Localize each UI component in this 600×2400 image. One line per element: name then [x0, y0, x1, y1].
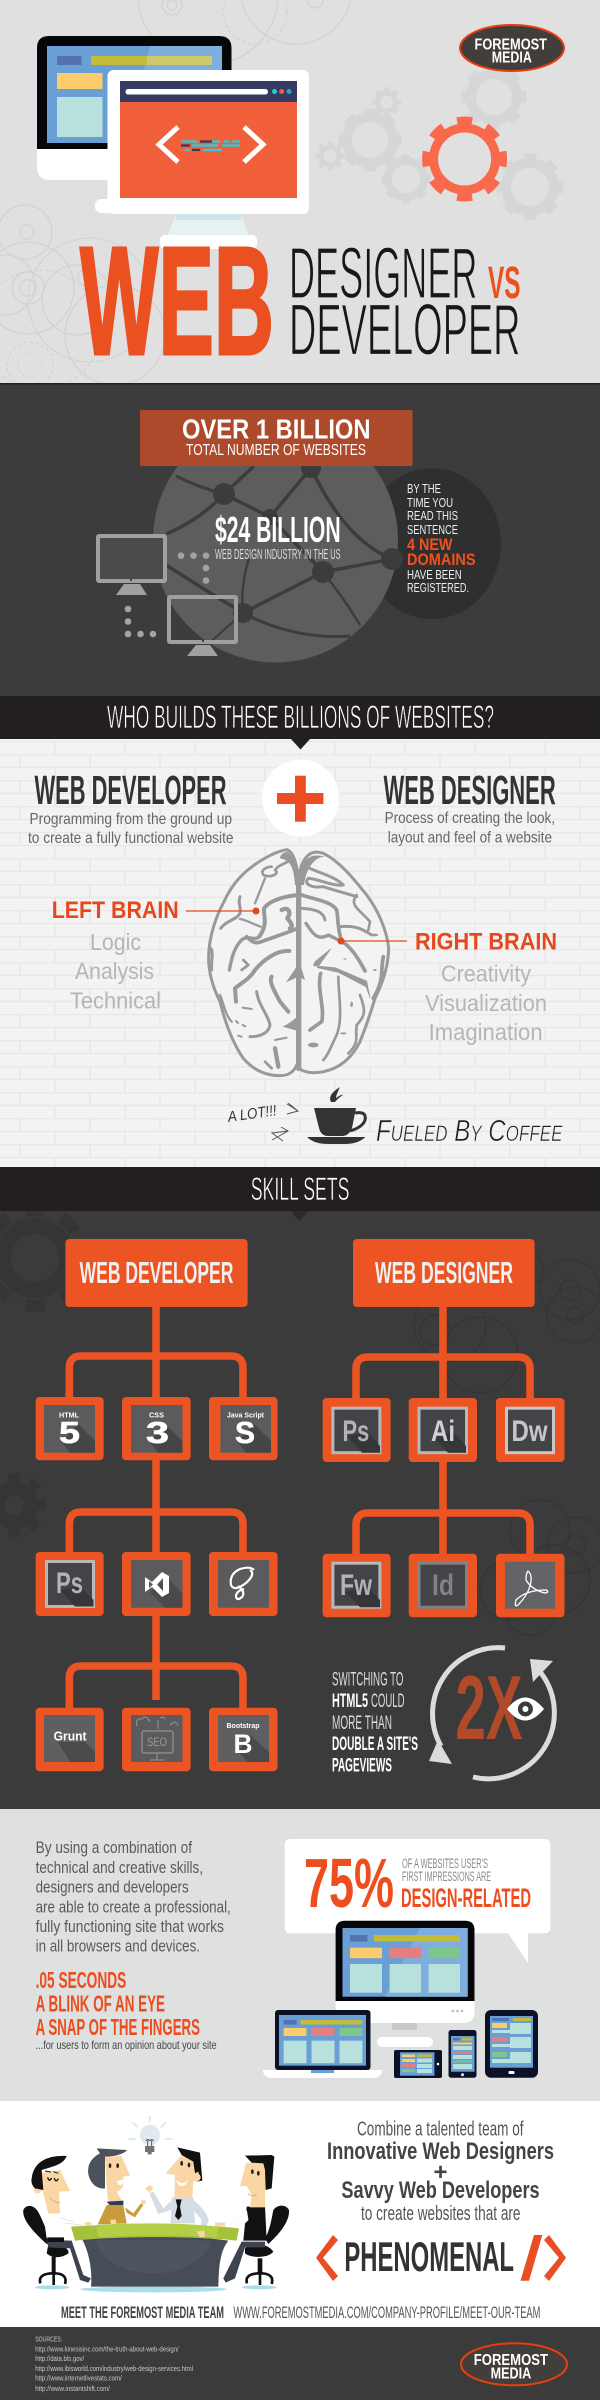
icon: javascript [209, 1397, 278, 1460]
icon: 2x with arrows and eye [429, 1648, 554, 1779]
text block: sources: SOURCES: [35, 2337, 62, 2344]
panel: website statistics [0, 383, 600, 696]
icon: designer photoshop: Ps [342, 1415, 369, 1448]
logo: footer Foremost Media: MEDIA [491, 2365, 532, 2382]
label: right brain: Creativity [441, 961, 531, 987]
label: right brain: Imagination [429, 1019, 543, 1045]
icon: acrobat [496, 1554, 564, 1617]
callout: over 1 billion [140, 410, 412, 466]
icon: css3 [122, 1397, 191, 1460]
callout: domains bubble: 4 NEW [407, 536, 453, 554]
callout: domains bubble [363, 468, 501, 619]
text block: combination of skills: designers and developers [36, 1879, 189, 1897]
icon: html5: 5 [59, 1415, 80, 1450]
icon: javascript: S [235, 1415, 255, 1450]
icon: photoshop [36, 1552, 104, 1616]
icon: html5 [36, 1397, 104, 1460]
annotation: a lot [226, 1102, 298, 1141]
text block: combine a talented team [327, 2119, 554, 2225]
panel: roles and brain background [0, 739, 600, 1167]
text: web designer: Process of creating the look, [385, 810, 555, 827]
panel: header background [0, 0, 600, 383]
callout: domains bubble: READ THIS [407, 509, 458, 523]
annotation: a lot: A LOT!!! [226, 1102, 278, 1126]
callout: domains bubble: HAVE BEEN [407, 568, 462, 582]
text: meet the team [61, 2304, 540, 2322]
panel: skill sets background [0, 1211, 600, 1809]
icon: plus [262, 760, 339, 836]
text block: combination of skills: technical and creative skills, [36, 1859, 203, 1877]
icon: grunt [36, 1708, 104, 1771]
icon: html5: HTML [59, 1410, 79, 1420]
tree connectors: developer [69, 1307, 243, 1708]
callout: domains bubble: TIME YOU [407, 496, 453, 510]
icon: computer two [169, 597, 236, 656]
icon: responsive tablet [485, 2010, 538, 2078]
callout: over 1 billion: OVER 1 BILLION [182, 413, 370, 444]
callout: over 1 billion: TOTAL NUMBER OF WEBSITES [186, 442, 366, 459]
text: web developer: Programming from the ground up [30, 811, 232, 828]
text: web designer: layout and feel of a website [388, 830, 552, 847]
icon: dreamweaver [496, 1398, 564, 1462]
text block: blink of an eye: ...for users to form an opinion about your site [36, 2038, 217, 2052]
illustration: team meeting [23, 2116, 289, 2292]
icon: coffee cup [307, 1087, 366, 1144]
icon: javascript: Java Script [227, 1410, 264, 1420]
icon: bootstrap [209, 1708, 278, 1771]
icon: seo: SEO [147, 1735, 167, 1749]
label: right brain: RIGHT BRAIN [415, 928, 557, 955]
icon: designer photoshop [323, 1398, 391, 1462]
text block: blink of an eye: .05 SECONDS [36, 1967, 126, 1993]
icon: front desktop monitor with code [95, 70, 309, 249]
icon: fireworks [323, 1554, 391, 1617]
logo: Foremost Media [460, 25, 564, 71]
icon: bootstrap: B [234, 1729, 252, 1759]
icon: 2x with arrows and eye: 2X [455, 1658, 522, 1759]
text: 24 billion [215, 509, 341, 563]
text block: combine a talented team: Savvy Web Developers [341, 2177, 540, 2204]
text block: sources: http://www.kinesisinc.com/the-truth-about-web-design/ [35, 2346, 179, 2353]
panel: impressions background [0, 1809, 600, 2101]
callout: domains bubble: BY THE [407, 482, 441, 496]
icon: connection dots [125, 552, 209, 637]
icon: dreamweaver: Dw [512, 1415, 548, 1448]
label: right brain: Visualization [425, 990, 547, 1016]
label: left brain: LEFT BRAIN [52, 897, 179, 924]
heading: skill sets [0, 1167, 600, 1221]
text block: combination of skills: in all browsers and devices. [36, 1938, 200, 1956]
text block: sources [35, 2337, 193, 2393]
box: web designer [353, 1239, 535, 1307]
icon: indesign [409, 1554, 477, 1617]
icon: css3: CSS [149, 1410, 164, 1420]
icon: responsive desktop [336, 1921, 474, 2047]
icon: network globe [153, 418, 403, 662]
text block: blink of an eye: A BLINK OF AN EYE [36, 1991, 165, 2017]
text: web developer: WEB DEVELOPER [34, 767, 226, 813]
icon: illustrator: Ai [431, 1415, 455, 1448]
text block: sources: http://www.ibisworld.com/industry/web-design-services.html [35, 2366, 193, 2373]
label: right brain [338, 928, 557, 1045]
text: 24 billion: WEB DESIGN INDUSTRY IN THE US [215, 547, 341, 563]
text block: combination of skills: are able to create a professional, [36, 1898, 231, 1916]
box: web developer [65, 1239, 248, 1307]
callout: 75 percent speech bubble: OF A WEBSITES USER'S [402, 1856, 488, 1871]
panel: footer [0, 2327, 600, 2400]
table [71, 2223, 239, 2292]
person: right man [215, 2155, 289, 2289]
heading: who builds these billions of websites [0, 696, 600, 750]
text: web developer: to create a fully functional website [28, 830, 234, 847]
label: left brain: Logic [90, 929, 141, 955]
callout: domains bubble: DOMAINS [407, 551, 476, 569]
decorative dark gears and swirls [0, 1210, 600, 1635]
person: woman [88, 2148, 146, 2224]
text block: sources: http://data.bls.gov/ [35, 2356, 84, 2363]
logo: footer Foremost Media: FOREMOST [474, 2352, 548, 2369]
text block: combine a talented team: Combine a talented team of [357, 2119, 524, 2141]
icon: grunt: Grunt [54, 1730, 87, 1744]
text: 24 billion: $24 BILLION [215, 509, 341, 550]
callout: 75 percent speech bubble: 75% [304, 1844, 394, 1922]
person: left man [23, 2156, 92, 2289]
text block: combination of skills: By using a combination of [36, 1839, 192, 1857]
icon: computer one [98, 536, 165, 595]
label: left brain [52, 897, 260, 1014]
heading: skill sets: SKILL SETS [251, 1171, 350, 1207]
callout: domains bubble: REGISTERED. [407, 581, 469, 595]
callout: domains bubble: SENTENCE [407, 523, 458, 537]
logo: Foremost Media: FOREMOST [474, 36, 547, 53]
icon: fireworks: Fw [340, 1569, 373, 1602]
callout: 75 percent speech bubble: FIRST IMPRESSIONS ARE [402, 1869, 491, 1884]
icon: seo [122, 1708, 191, 1771]
text: html5 statistic: SWITCHING TO [332, 1669, 404, 1690]
icon: light bulb [128, 2116, 172, 2154]
text: web designer [384, 767, 556, 847]
box: web developer: WEB DEVELOPER [80, 1255, 233, 1290]
text: web developer [28, 767, 234, 847]
icon: background grey gears [317, 68, 560, 217]
callout: 75 percent speech bubble [285, 1839, 550, 1963]
icon: photoshop: Ps [56, 1567, 83, 1600]
icon: back desktop monitor [37, 36, 232, 180]
text block: combine a talented team: + [434, 2159, 448, 2186]
person: centre man [145, 2147, 209, 2231]
icon: responsive phone portrait [448, 2030, 476, 2078]
text: html5 statistic: HTML5 [332, 1691, 368, 1712]
icon: sass [209, 1552, 278, 1616]
text block: sources: http://www.instantshift.com/ [35, 2386, 110, 2393]
tree connectors: designer [356, 1307, 530, 1554]
icon: brain [209, 850, 389, 1076]
title: WEB [80, 215, 274, 387]
icon: css3: 3 [146, 1415, 169, 1450]
text: html5 statistic: COULD [371, 1691, 404, 1712]
icon: responsive phone landscape [394, 2050, 442, 2078]
text block: combination of skills [36, 1839, 231, 1956]
icon: indesign: Id [432, 1569, 454, 1602]
label: left brain: Analysis [75, 958, 154, 984]
panel: team background [0, 2101, 600, 2328]
text: html5 statistic: DOUBLE A SITE'S [332, 1734, 418, 1755]
text block: blink of an eye: A SNAP OF THE FINGERS [36, 2014, 200, 2040]
icon: orange gear [427, 121, 503, 197]
icon: responsive laptop [263, 2010, 382, 2078]
text block: combination of skills: fully functioning site that works [36, 1918, 224, 1936]
title: VS [488, 257, 520, 308]
text: html5 statistic: PAGEVIEWS [332, 1756, 392, 1777]
icon: visual studio [122, 1552, 191, 1616]
text: meet the team: MEET THE FOREMOST MEDIA TEAM [61, 2304, 224, 2322]
icon: bootstrap: Bootstrap [226, 1721, 260, 1730]
icon: illustrator [409, 1398, 477, 1462]
label: left brain: Technical [70, 988, 161, 1014]
text: html5 statistic [332, 1669, 418, 1777]
text block: combine a talented team: to create websites that are [361, 2203, 520, 2225]
text: html5 statistic: MORE THAN [332, 1713, 392, 1734]
logo: Foremost Media: MEDIA [492, 49, 532, 66]
logo: footer Foremost Media [461, 2343, 567, 2385]
text block: blink of an eye [36, 1967, 217, 2052]
text block: sources: http://www.internetlivestats.com/ [35, 2376, 122, 2383]
decorative swirls top and left [0, 0, 352, 390]
